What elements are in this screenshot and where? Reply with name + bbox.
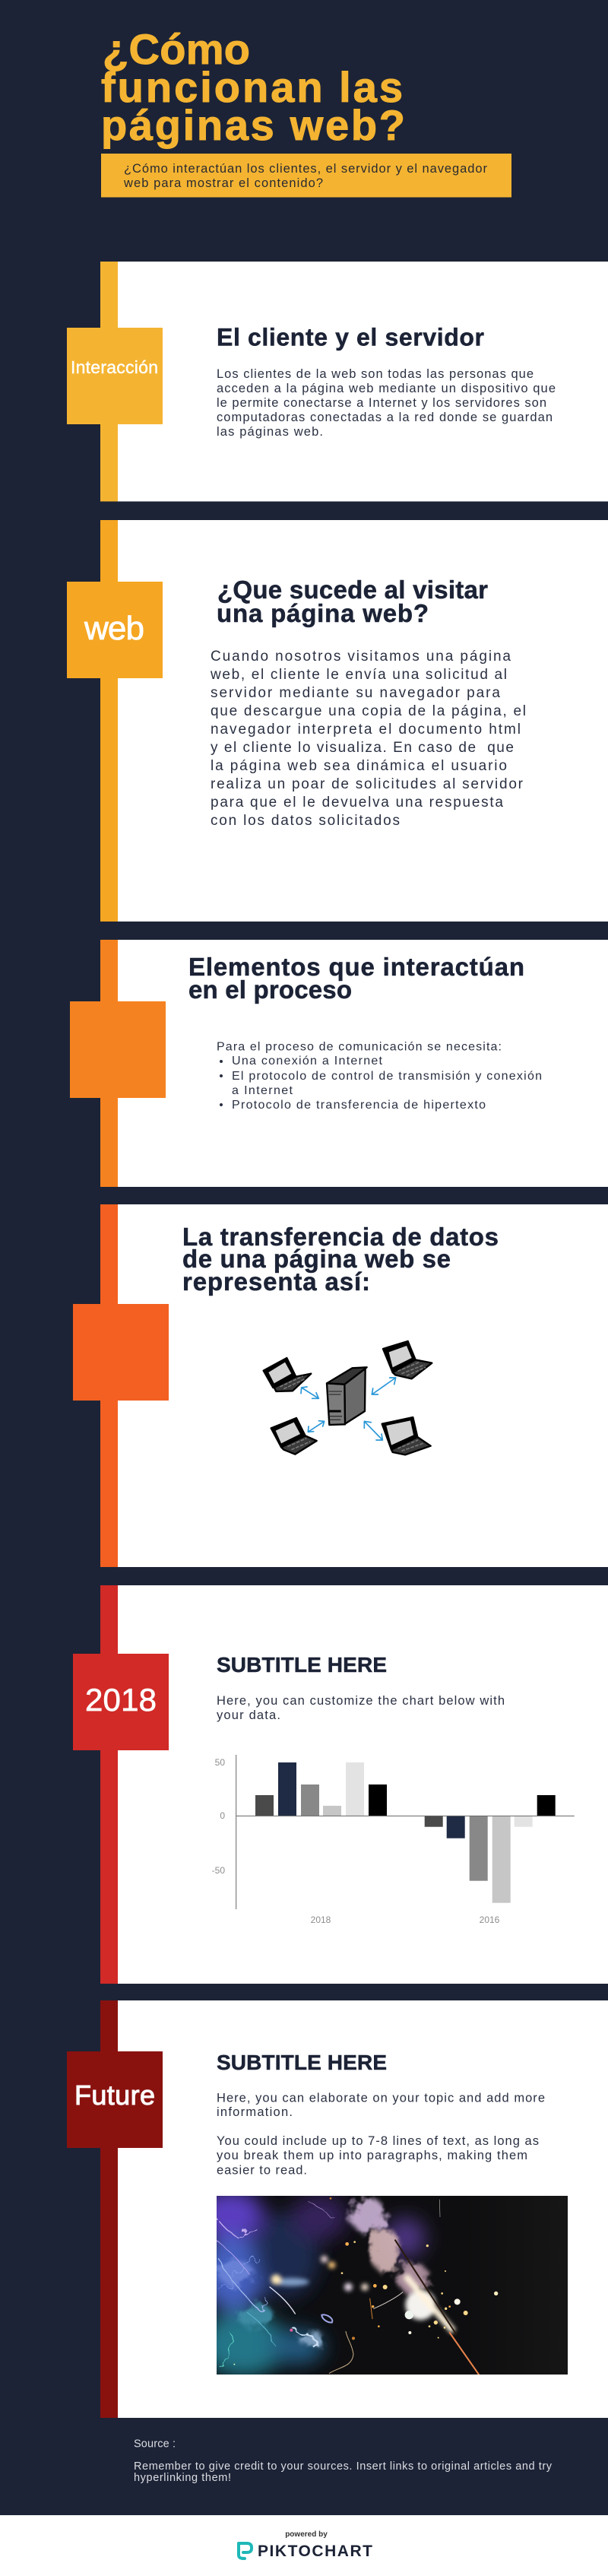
panel: chart section bbox=[73, 1585, 608, 1984]
heading: La transferencia: representa así: bbox=[182, 1267, 370, 1296]
text block: clientes bbox=[217, 367, 556, 439]
text block: visita: Cuando nosotros visitamos una página bbox=[211, 649, 511, 665]
heading: subtitle here: SUBTITLE HERE bbox=[217, 2051, 387, 2074]
heading: Elementos: Elementos que interactúan bbox=[188, 953, 524, 981]
heading: La transferencia bbox=[182, 1223, 499, 1296]
text block: lista: El protocolo de control de transmisión y conexión bbox=[232, 1070, 542, 1083]
text block: visita bbox=[210, 649, 526, 829]
tag: orange square bbox=[70, 1001, 166, 1098]
illustration: server and laptops bbox=[262, 1340, 433, 1455]
tag: 2018: 2018 bbox=[85, 1682, 157, 1718]
icon: laptop bottom right bbox=[382, 1417, 431, 1455]
subtitle banner: web para mostrar el contenido? bbox=[123, 176, 323, 190]
tag: web: web bbox=[84, 610, 144, 647]
heading: Que sucede: ¿Que sucede al visitar bbox=[217, 576, 488, 604]
tag: orange-red square bbox=[73, 1304, 169, 1401]
timeline bar 3 bbox=[100, 940, 118, 1187]
panel: future section bbox=[67, 2000, 608, 2418]
text block: elaborate bbox=[217, 2091, 545, 2178]
text block: elaborate: you break them up into paragraphs, making them bbox=[217, 2149, 527, 2162]
source text bbox=[134, 2438, 553, 2484]
icon: server tower bbox=[327, 1367, 367, 1425]
title: funcionan las bbox=[101, 63, 403, 111]
icon: piktochart logo bbox=[239, 2543, 252, 2559]
tag: Interacción bbox=[67, 328, 163, 424]
text block: clientes: las páginas web. bbox=[217, 425, 323, 439]
timeline bar 1 bbox=[100, 262, 118, 502]
text block: visita: web, el cliente le envía una solicitud al bbox=[210, 667, 507, 683]
text block: elaborate: information. bbox=[217, 2105, 293, 2119]
subtitle banner bbox=[101, 154, 511, 198]
text block: clientes: le permite conectarse a Internet y los servidores son bbox=[217, 396, 546, 410]
source text: Source : bbox=[134, 2438, 176, 2450]
text block: visita: realiza un poar de solicitudes al servidor bbox=[211, 776, 524, 792]
text block: chart intro bbox=[217, 1694, 505, 1722]
text block: visita: servidor mediante su navegador para bbox=[211, 685, 500, 701]
photo: sparkler bbox=[217, 2196, 568, 2375]
axis labels: 2016 bbox=[480, 1915, 500, 1925]
text block: elaborate: Here, you can elaborate on your topic and add more bbox=[217, 2091, 545, 2105]
timeline bar 5 bbox=[100, 1585, 118, 1984]
heading: Que sucede: una página web? bbox=[217, 599, 429, 627]
source text: Remember to give credit to your sources. Insert links to original articles and try bbox=[134, 2460, 553, 2473]
title bbox=[101, 25, 405, 149]
heading: La transferencia: La transferencia de datos bbox=[182, 1223, 499, 1251]
text block: elaborate: You could include up to 7-8 lines of text, as long as bbox=[217, 2134, 539, 2148]
text block: clientes: computadoras conectadas a la red donde se guardan bbox=[217, 411, 553, 424]
tag: Interacción: Interacción bbox=[71, 357, 158, 377]
icon: laptop top left bbox=[264, 1358, 311, 1391]
source text: hyperlinking them! bbox=[134, 2472, 231, 2484]
text block: clientes: Los clientes de la web son todas las personas que bbox=[217, 367, 534, 381]
text block: visita: navegador interpreta el documento html bbox=[211, 722, 521, 738]
text block: visita: que descargue una copia de la página, el bbox=[211, 703, 526, 719]
tag: Future: Future bbox=[74, 2080, 155, 2111]
text block: lista: Una conexión a Internet bbox=[232, 1055, 383, 1068]
text block: chart intro: Here, you can customize the chart below with bbox=[217, 1694, 505, 1708]
axis labels: 0 bbox=[220, 1810, 225, 1821]
text block: elaborate: easier to read. bbox=[217, 2164, 307, 2178]
text block: clientes: acceden a la página web mediante un dispositivo que bbox=[217, 382, 556, 395]
heading: Elementos: en el proceso bbox=[188, 976, 352, 1004]
text block: lista bbox=[217, 1040, 542, 1112]
text block: visita: para que el le devuelva una respuesta bbox=[211, 795, 503, 811]
powered by: powered by bbox=[285, 2530, 328, 2539]
bar chart bbox=[212, 1755, 575, 1925]
axis labels: 2018 bbox=[311, 1915, 331, 1925]
text block: visita: y el cliente lo visualiza. En caso de que bbox=[211, 740, 514, 756]
timeline bar 4 bbox=[100, 1204, 118, 1567]
tag: Future bbox=[67, 2051, 163, 2148]
bars 2018 bbox=[255, 1762, 387, 1816]
icon: laptop bottom left bbox=[271, 1418, 317, 1455]
text block: chart intro: your data. bbox=[217, 1708, 280, 1722]
panel: transferencia de datos bbox=[73, 1204, 608, 1567]
heading: El cliente y el servidor: El cliente y el servidor bbox=[217, 324, 484, 351]
axis labels: -50 bbox=[212, 1865, 225, 1876]
panel: qué sucede al visitar bbox=[67, 520, 608, 922]
text block: visita: con los datos solicitados bbox=[211, 813, 400, 829]
bars 2016 bbox=[425, 1795, 556, 1903]
timeline bar 2 bbox=[100, 520, 118, 922]
text block: lista: Para el proceso de comunicación se necesita: bbox=[217, 1040, 502, 1054]
text block: lista: a Internet bbox=[232, 1084, 293, 1097]
logo text: PIKTOCHART bbox=[258, 2543, 372, 2560]
title: ¿Cómo bbox=[103, 25, 250, 73]
heading: Que sucede bbox=[217, 576, 488, 627]
footer: piktochart bbox=[0, 2515, 608, 2576]
text block: visita: la página web sea dinámica el usuario bbox=[211, 758, 507, 774]
subtitle banner: ¿Cómo interactúan los clientes, el servidor y el navegador bbox=[124, 162, 488, 176]
heading: Elementos bbox=[188, 953, 524, 1004]
tag: 2018 bbox=[73, 1654, 169, 1750]
axis labels bbox=[212, 1757, 500, 1925]
text block: lista: Protocolo de transferencia de hipertexto bbox=[232, 1099, 486, 1112]
heading: subtitle here: SUBTITLE HERE bbox=[217, 1653, 387, 1677]
title: páginas web? bbox=[101, 101, 405, 149]
axis labels: 50 bbox=[215, 1757, 225, 1768]
heading: La transferencia: de una página web se bbox=[182, 1245, 451, 1273]
icon: blue arrows bbox=[301, 1378, 396, 1440]
timeline bar 6 bbox=[100, 2000, 118, 2418]
panel: el cliente y el servidor bbox=[67, 262, 608, 502]
panel: elementos que interactúan bbox=[70, 940, 608, 1187]
icon: laptop top right bbox=[383, 1341, 432, 1378]
tag: web bbox=[67, 582, 163, 678]
